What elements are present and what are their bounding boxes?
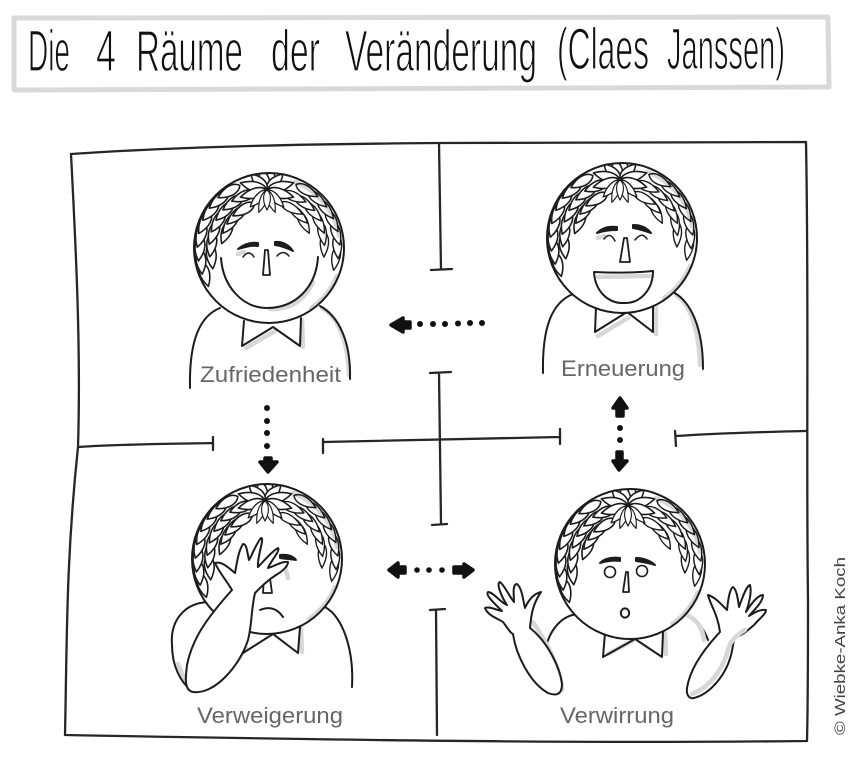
person: Verweigerung: [172, 478, 352, 728]
label: Erneuerung: Erneuerung: [561, 356, 685, 381]
arrow: Zufriedenheit to Verweigerung: [260, 405, 277, 472]
copyright: © Wiebke-Anka Koch: [833, 557, 849, 735]
title box: [14, 17, 829, 90]
title: Die: [28, 19, 70, 84]
person: Verwirrung: [485, 483, 766, 728]
arrow: Erneuerung and Verwirrung double: [613, 398, 627, 470]
title: Räume: [136, 19, 243, 84]
title: [28, 17, 785, 84]
label: Verwirrung: Verwirrung: [560, 703, 674, 728]
label: Verweigerung: Verweigerung: [197, 703, 343, 728]
title: 4: [96, 19, 116, 84]
label: Zufriedenheit: Zufriedenheit: [200, 362, 341, 387]
person: Erneuerung: [543, 157, 703, 381]
title: (Claes: [557, 17, 649, 82]
title: der: [271, 19, 320, 84]
arrow: Erneuerung to Zufriedenheit: [391, 318, 485, 332]
frame with room dividers: [65, 142, 808, 742]
title: Veränderung: [345, 19, 537, 84]
person: Zufriedenheit: [190, 167, 350, 388]
arrow: Verweigerung and Verwirrung double: [389, 563, 473, 577]
